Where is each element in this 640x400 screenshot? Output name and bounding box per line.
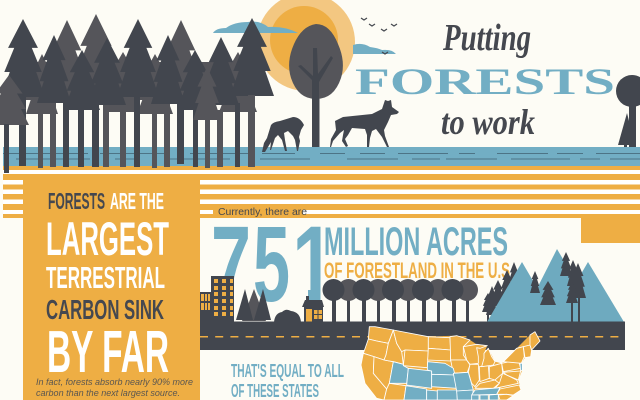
dark pine trees <box>1 18 274 167</box>
large tree <box>289 24 343 147</box>
heading: by far: BY FAR <box>47 319 169 385</box>
map silhouette <box>361 327 540 400</box>
row of round trees <box>322 279 478 322</box>
big number 751 <box>211 203 340 324</box>
house <box>302 296 324 322</box>
river <box>3 147 640 166</box>
triangle trees <box>236 289 271 321</box>
heading: forests are the: FORESTS <box>48 188 105 214</box>
city buildings <box>200 276 234 322</box>
panel: carbon sink <box>23 174 200 400</box>
pines behind mountains <box>482 262 520 322</box>
pines on mountains <box>530 252 586 322</box>
of forestland: OF FORESTLAND IN THE U.S <box>324 258 510 283</box>
states caption <box>231 361 344 400</box>
front light pine trees <box>0 67 255 168</box>
road <box>200 322 625 350</box>
million acres: MILLION ACRES <box>324 220 508 264</box>
title line: Putting: Putting <box>442 17 531 59</box>
title <box>355 17 615 142</box>
deer walking <box>330 100 399 147</box>
states caption: THAT'S EQUAL TO ALL <box>231 361 344 381</box>
heading: terrestrial: TERRESTRIAL <box>46 260 165 295</box>
deer grazing <box>262 117 304 152</box>
light pine trees <box>26 14 257 168</box>
big number 751: 1 <box>292 203 336 324</box>
orange stripes <box>3 166 640 243</box>
heading: largest: LARGEST <box>46 212 169 265</box>
birds <box>361 18 397 54</box>
orange states <box>361 327 540 400</box>
panel: carbon sink: ARE THE <box>110 188 164 214</box>
map of US states <box>361 327 540 400</box>
title line: FORESTS: FORESTS <box>355 62 615 103</box>
mountains with pines <box>482 249 624 322</box>
forest <box>0 14 274 173</box>
canopy backing <box>22 62 244 100</box>
note text: carbon than the next largest source. <box>36 388 180 398</box>
front trunk <box>4 124 9 173</box>
note text: In fact, forests absorb nearly 90% more <box>36 377 193 387</box>
heading: carbon sink: CARBON SINK <box>46 294 164 325</box>
intro text: Currently, there are <box>218 207 307 218</box>
title line: to work: to work <box>441 102 535 142</box>
big number 751: 7 <box>211 203 251 324</box>
note text <box>36 377 193 398</box>
blue states <box>389 362 522 400</box>
sun <box>257 0 355 91</box>
clouds <box>213 22 396 54</box>
small tree right <box>616 75 640 147</box>
bush <box>274 310 301 322</box>
big number 751: 5 <box>253 203 290 324</box>
